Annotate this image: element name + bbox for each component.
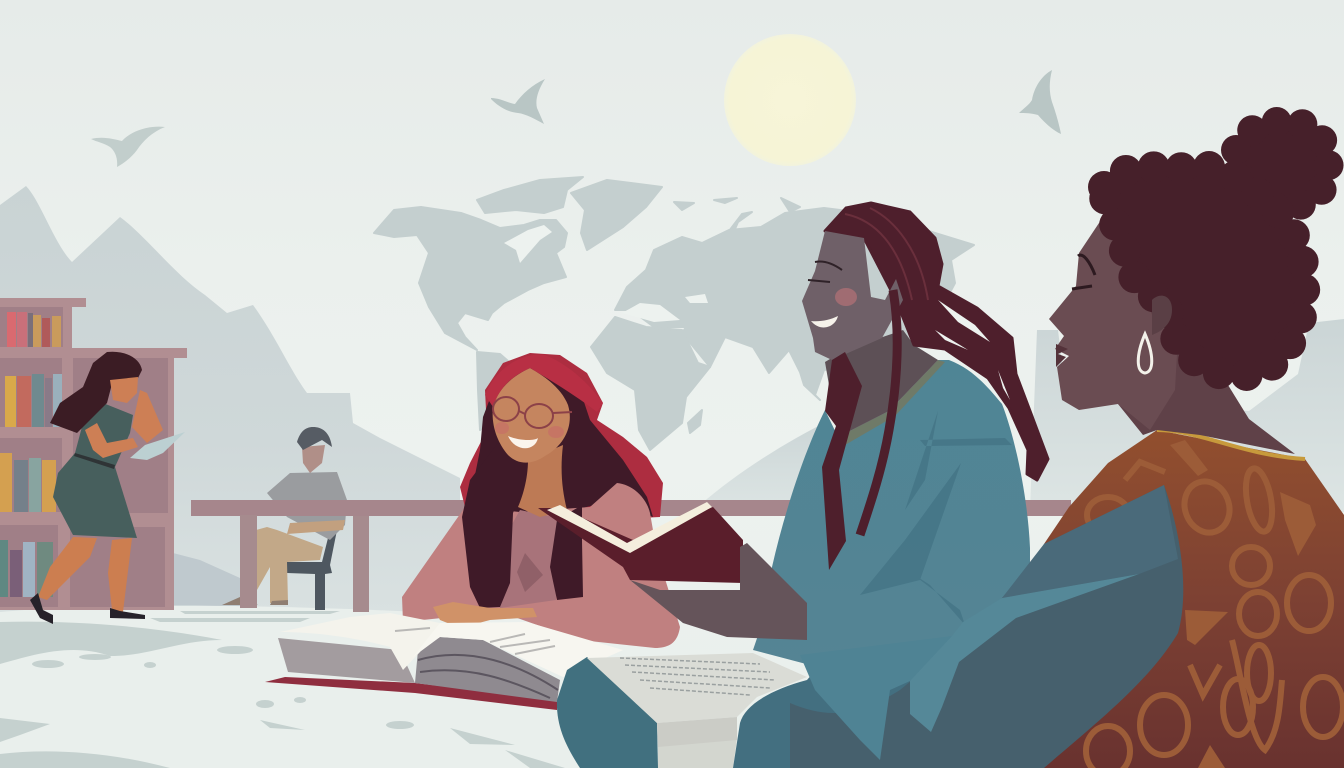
solid pattern shapes bbox=[1170, 440, 1316, 768]
eye and brow bbox=[808, 262, 842, 282]
map: madagascar bbox=[688, 410, 702, 433]
map: north america bbox=[374, 207, 567, 350]
pages block left bbox=[278, 638, 415, 683]
floor shadows bbox=[0, 611, 565, 768]
hair bbox=[297, 427, 332, 450]
wrap upper wedge bbox=[1002, 485, 1178, 598]
hands bbox=[433, 602, 537, 628]
legs bbox=[38, 537, 132, 612]
handwriting bbox=[620, 658, 775, 695]
smile bbox=[508, 436, 538, 448]
hair strand long bbox=[860, 290, 897, 535]
bird left bbox=[91, 127, 165, 167]
books on shelves bbox=[0, 312, 62, 597]
pages bbox=[547, 502, 712, 553]
standing woman reading bbox=[30, 352, 185, 624]
ear bbox=[1152, 296, 1172, 335]
open book on floor bbox=[265, 613, 623, 710]
shoes bbox=[222, 597, 288, 605]
woman neck and face bbox=[1049, 220, 1295, 454]
bun bbox=[1236, 121, 1329, 207]
wrap body bbox=[790, 485, 1183, 768]
reader neck and face bbox=[802, 203, 1048, 570]
red cover bbox=[265, 677, 557, 710]
cover bbox=[538, 507, 743, 583]
hair strand left bbox=[822, 352, 862, 570]
pages block right bbox=[415, 637, 560, 702]
lap and book bbox=[557, 650, 1100, 768]
bodice bbox=[75, 403, 133, 467]
skirt bbox=[53, 453, 137, 538]
neck bbox=[825, 330, 938, 437]
mountains left bbox=[0, 186, 460, 612]
bird right bbox=[1019, 70, 1061, 134]
eye and brow bbox=[1072, 255, 1095, 289]
white right page bbox=[413, 622, 623, 677]
sweater bbox=[402, 483, 680, 648]
head bbox=[302, 445, 325, 473]
map: eurasia bbox=[615, 208, 974, 400]
red headscarf bbox=[460, 353, 663, 520]
mountains center right bbox=[700, 420, 830, 512]
woman afro and bun bbox=[1104, 121, 1329, 376]
map: south america bbox=[477, 352, 516, 430]
collar bbox=[838, 360, 945, 445]
map: iceland bbox=[674, 202, 694, 210]
face bbox=[802, 231, 903, 360]
woman dress bbox=[1044, 430, 1344, 768]
girl with glasses bbox=[402, 353, 680, 648]
hair back bbox=[825, 203, 1048, 480]
reader sweater bbox=[753, 360, 1030, 670]
shoes bbox=[30, 593, 145, 624]
cheek bbox=[835, 288, 857, 306]
map: arctic islands bbox=[477, 177, 583, 213]
neck bbox=[1118, 345, 1295, 454]
lips bbox=[1056, 344, 1068, 367]
world map bbox=[374, 177, 974, 450]
teal wrap bbox=[790, 485, 1183, 768]
face bbox=[110, 377, 138, 403]
sweater centre bbox=[492, 510, 558, 608]
teal knee bbox=[557, 657, 658, 768]
arms bbox=[85, 390, 163, 458]
page lines bbox=[418, 655, 558, 698]
map: africa bbox=[591, 317, 710, 450]
book stack lower bbox=[658, 738, 737, 768]
white left page bbox=[280, 613, 440, 670]
trousers bbox=[253, 527, 323, 603]
scarf band bbox=[485, 355, 603, 412]
sweater diamond bbox=[517, 553, 543, 592]
sleeve band bbox=[800, 636, 960, 760]
floor bbox=[0, 606, 600, 768]
hair bbox=[50, 352, 142, 433]
face bbox=[493, 368, 570, 463]
shirt bbox=[267, 472, 347, 540]
face bbox=[1049, 220, 1180, 430]
light sweep bbox=[910, 574, 1139, 732]
glasses bbox=[493, 397, 572, 428]
hand-held book bbox=[130, 432, 185, 460]
mountains low foreground bbox=[173, 553, 240, 610]
book top page bbox=[587, 653, 807, 723]
collar trim bbox=[1157, 430, 1305, 459]
main hair bbox=[1104, 166, 1304, 376]
bird center bbox=[491, 79, 545, 124]
map: hudson bay bbox=[504, 225, 552, 263]
map: greenland bbox=[571, 180, 662, 250]
neck bbox=[518, 445, 567, 517]
map: svalbard and siberian islands bbox=[714, 198, 800, 236]
cheeks bbox=[495, 422, 564, 438]
text marks bbox=[395, 628, 555, 654]
sweater folds bbox=[860, 411, 1012, 625]
red book held bbox=[538, 502, 743, 583]
reader hand bbox=[630, 543, 807, 640]
belt bbox=[74, 453, 115, 469]
earring bbox=[1138, 334, 1152, 373]
hair front right bbox=[550, 505, 583, 600]
sun bbox=[724, 34, 856, 166]
smile bbox=[811, 316, 838, 327]
hair back bbox=[470, 362, 653, 520]
lap right bbox=[733, 650, 1100, 768]
hair front left bbox=[462, 440, 530, 608]
hair strand lines bbox=[845, 208, 928, 300]
long table bbox=[191, 500, 1071, 612]
forearm bbox=[287, 520, 345, 534]
dress patterns bbox=[1086, 462, 1343, 768]
seated man bbox=[222, 427, 347, 610]
map: mediterranean bbox=[622, 294, 708, 322]
bookshelf bbox=[0, 298, 187, 610]
white gaps in hair bbox=[935, 300, 1010, 400]
chair bbox=[287, 530, 337, 610]
mountains right bbox=[1030, 319, 1344, 512]
book front edge bbox=[657, 717, 737, 747]
